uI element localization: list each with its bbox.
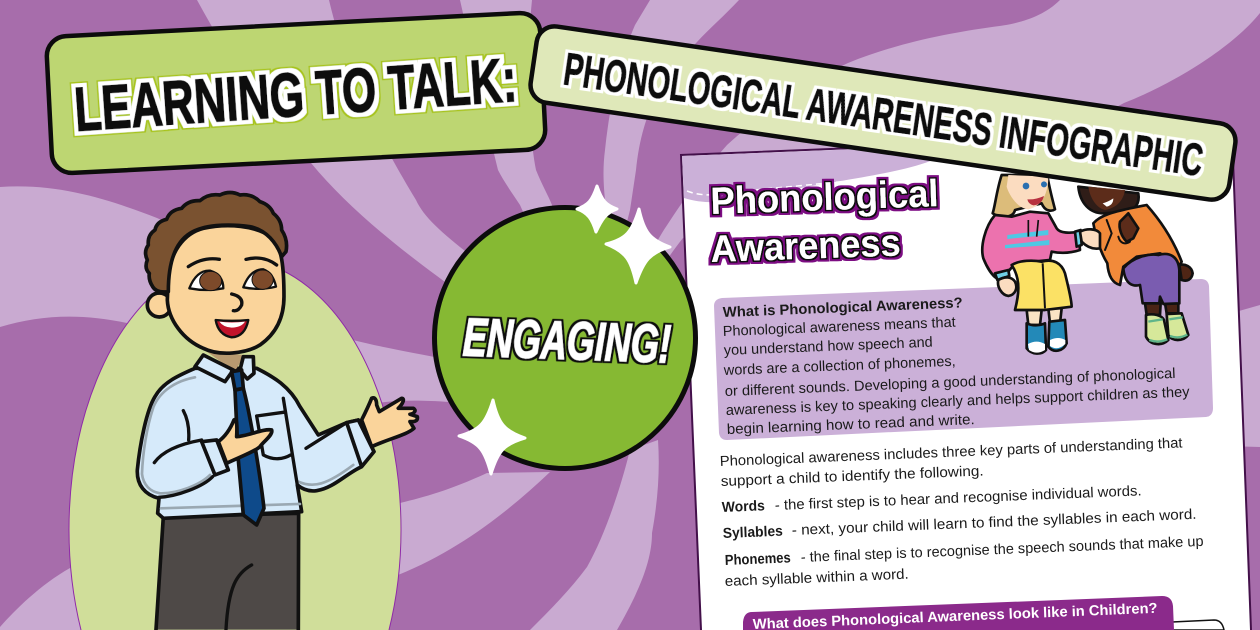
title banner: Learning to Talk [46,12,546,174]
panel: what is phonological awareness: words are a collection of phonemes, [723,354,956,379]
neck and collar [195,352,254,382]
left hand and cuff [202,420,272,475]
title banner: Learning to Talk: LEARNING TO TALK: [72,46,519,145]
panel: infographic page preview [681,133,1251,630]
circle badge: Engaging! [434,208,696,468]
icon: sparkle small top [577,186,617,232]
text block: three key parts [720,435,1204,590]
trousers [156,513,299,630]
heading: Phonological Awareness [710,173,939,271]
illustration: man in shirt and tie [137,192,417,630]
text block: three key parts: - next, your child will learn to find the syllables in each word. [792,507,1197,539]
illustration: girl in pink hoodie [982,175,1100,354]
icon: sparkle bottom [459,400,525,474]
panel: what is phonological awareness: What is Phonological Awareness? [723,295,963,321]
text block: three key parts: Phonemes [725,550,791,569]
text block: three key parts: - the first step is to hear and recognise individual words. [775,483,1142,514]
icon: sparkle large top [606,209,670,283]
shirt [137,368,374,518]
panel: what is phonological awareness: or different sounds. Developing a good understanding of phonological [725,366,1176,400]
text block: three key parts: Syllables [723,524,783,542]
illustration: child in orange jumper [1078,187,1193,344]
head [146,192,287,353]
right hand and cuff [347,398,417,467]
panel: what is phonological awareness [714,279,1213,440]
text block: three key parts: Words [722,498,765,516]
text block: three key parts: each syllable within a word. [725,567,909,590]
header swoosh with stitched line [682,145,960,202]
panel: what is phonological awareness: begin learning how to read and write. [727,412,975,438]
green oval behind man [69,259,401,630]
heading: Phonological Awareness: Phonological [710,173,939,223]
text block: three key parts: Phonological awareness includes three key parts of understanding that [720,435,1183,470]
text block: three key parts: - the final step is to recognise the speech sounds that make up [801,534,1204,566]
circle badge: Engaging!: ENGAGING! [462,307,672,375]
panel: what is phonological awareness: you understand how speech and [724,335,933,359]
panel: what is phonological awareness: Phonological awareness means that [723,315,956,340]
tie [232,370,264,525]
panel: what is phonological awareness: awareness is key to speaking clearly and helps support children as they [726,384,1191,419]
text block: three key parts: support a child to identify the following. [721,463,984,490]
heading: Phonological Awareness: Awareness [710,222,901,271]
